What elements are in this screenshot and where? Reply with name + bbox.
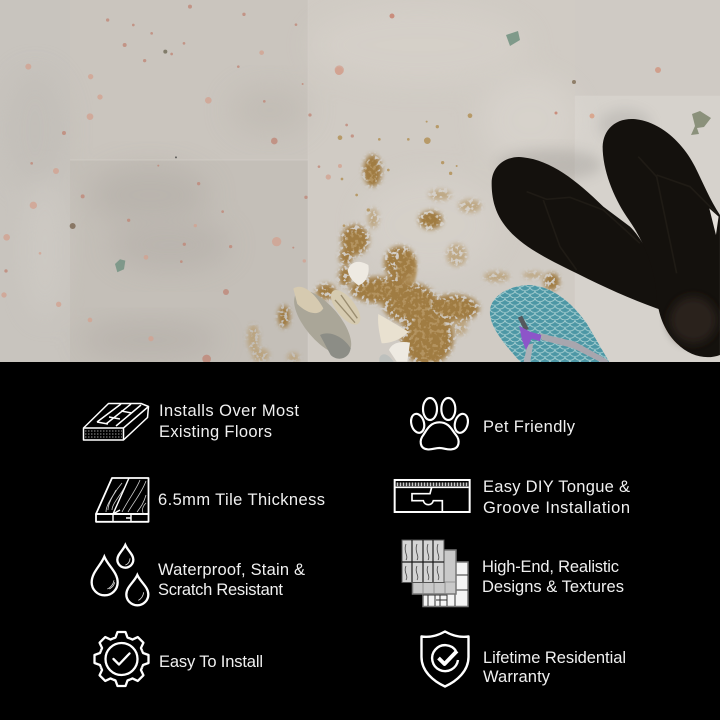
icon: gear with check	[94, 632, 148, 686]
left flip-flop	[492, 157, 662, 310]
text: easy to install: Easy To Install	[159, 653, 263, 671]
teal flip-flop	[487, 283, 613, 363]
text: installs over most existing floors: Installs Over Most	[159, 402, 299, 420]
feature: easy to install	[94, 632, 263, 686]
black flip-flops	[492, 119, 720, 357]
text: high-end realistic designs and textures	[482, 558, 624, 596]
text: waterproof, stain and scratch resistant: Waterproof, Stain &	[158, 561, 305, 579]
feature: waterproof	[92, 545, 305, 605]
text: pet friendly: Pet Friendly	[483, 418, 576, 436]
chips near top right	[335, 14, 711, 135]
text: easy diy tongue and groove installation: Groove Installation	[483, 499, 630, 517]
icon: water drops	[92, 545, 148, 605]
feature: realistic designs	[402, 540, 624, 606]
text: lifetime residential warranty	[483, 649, 626, 686]
text: lifetime residential warranty: Warranty	[483, 668, 551, 686]
text: easy diy tongue and groove installation	[483, 478, 630, 517]
icon: wood plank	[96, 478, 148, 522]
terrazzo speckles	[1, 5, 354, 363]
text: 6.5mm tile thickness: 6.5mm Tile Thickness	[158, 491, 325, 509]
photo: tiled floor with flip-flops, shells and sand	[0, 0, 720, 365]
text: installs over most existing floors: Existing Floors	[159, 423, 272, 441]
icon: stacked texture swatches	[402, 540, 468, 606]
text: installs over most existing floors	[159, 402, 299, 441]
icon: tongue and groove joint	[395, 480, 470, 512]
text: lifetime residential warranty: Lifetime Residential	[483, 649, 626, 667]
feature: lifetime warranty	[422, 632, 626, 686]
icon: floor cross-section	[84, 404, 148, 440]
feature: pet friendly	[409, 398, 576, 449]
text: waterproof, stain and scratch resistant	[158, 561, 305, 599]
icon: paw print	[409, 398, 470, 449]
icon: shield with check	[422, 632, 468, 686]
text: high-end realistic designs and textures: Designs & Textures	[482, 578, 624, 596]
green chip	[115, 259, 125, 272]
floor tiles	[0, 0, 720, 362]
sand piles	[247, 113, 560, 365]
right flip-flop	[603, 119, 720, 357]
feature: installs over most existing floors	[84, 402, 299, 441]
feature: tile thickness	[96, 478, 325, 522]
seashells	[284, 262, 410, 364]
text: easy diy tongue and groove installation: Easy DIY Tongue &	[483, 478, 630, 496]
text: high-end realistic designs and textures: High-End, Realistic	[482, 558, 619, 576]
feature: tongue and groove	[395, 478, 630, 517]
text: waterproof, stain and scratch resistant: Scratch Resistant	[158, 581, 283, 599]
